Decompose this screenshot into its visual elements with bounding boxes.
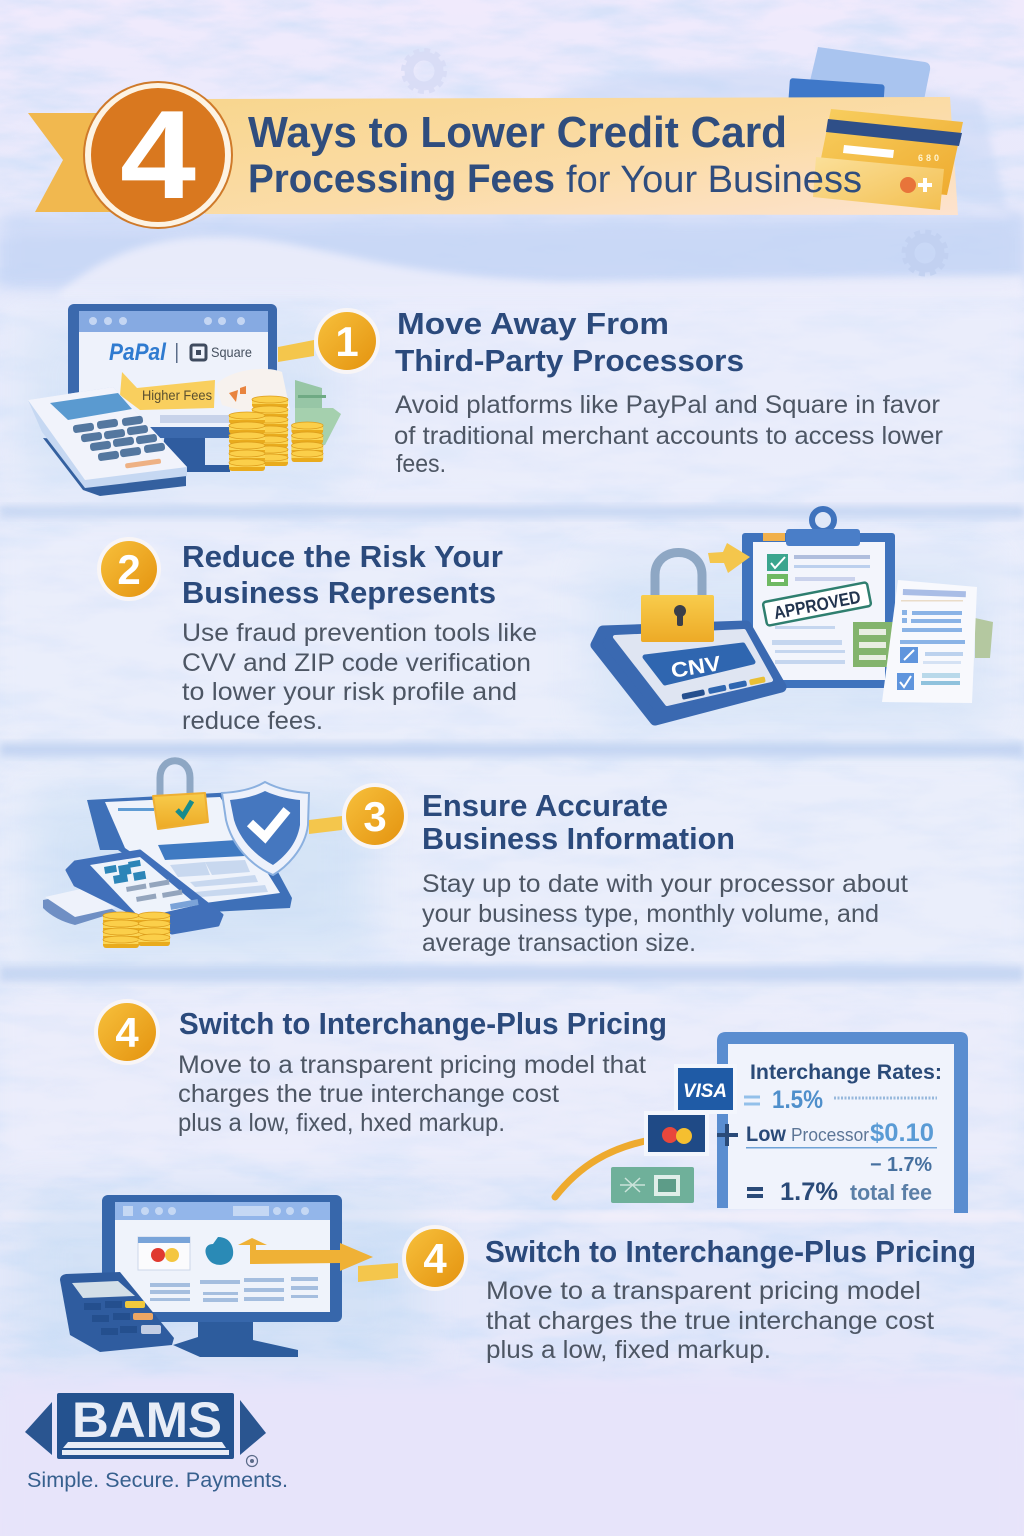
arrow: curved yellow bbox=[555, 1140, 650, 1197]
panel: step 4 first bbox=[94, 999, 968, 1213]
body 3: your business type, monthly volume, and bbox=[422, 900, 879, 928]
icon: cash stack bbox=[295, 380, 341, 445]
body 4: charges the true interchange cost bbox=[178, 1080, 559, 1108]
heading 3 bbox=[422, 788, 735, 856]
ribbon tail bbox=[28, 113, 110, 212]
panel: step 4 second bbox=[60, 1195, 976, 1364]
badge 2: 2 bbox=[117, 546, 141, 593]
illustration: document screen bbox=[87, 792, 292, 912]
icon: blue cards behind banner bbox=[788, 47, 930, 111]
panel: step 3 bbox=[43, 761, 908, 957]
icon: gold credit cards: 680 bbox=[918, 153, 942, 163]
rate rows: $0.10 bbox=[870, 1119, 934, 1147]
title text: for Your Business bbox=[566, 159, 862, 201]
rate rows: Interchange Rates: bbox=[750, 1061, 942, 1084]
body 1 bbox=[394, 391, 943, 478]
body 2 bbox=[182, 619, 537, 735]
body 4: Move to a transparent pricing model that bbox=[178, 1051, 646, 1079]
icon: background gear top bbox=[403, 50, 445, 92]
illustration: monitor with processors: PaPal bbox=[109, 339, 167, 366]
heading 2 bbox=[182, 539, 503, 610]
rate rows bbox=[717, 1061, 942, 1206]
connector 4 bbox=[358, 1263, 398, 1282]
illustration: clipboard approved: APPROVED bbox=[772, 587, 862, 623]
icon: green card bbox=[611, 1167, 694, 1203]
body 4b: that charges the true interchange cost bbox=[486, 1307, 934, 1335]
icon: visa card: VISA bbox=[683, 1081, 727, 1102]
heading 2: Reduce the Risk Your bbox=[182, 539, 503, 574]
badge 3: 3 bbox=[363, 793, 387, 840]
body 4b bbox=[486, 1277, 934, 1364]
icon: coin stacks bbox=[229, 396, 323, 471]
badge 4 bbox=[94, 999, 160, 1065]
illustration: monitor with pricing bbox=[102, 1195, 342, 1357]
body 2: Use fraud prevention tools like bbox=[182, 619, 537, 647]
heading 2: Business Represents bbox=[182, 575, 496, 610]
heading 4b: Switch to Interchange-Plus Pricing bbox=[485, 1234, 976, 1269]
body 1: of traditional merchant accounts to access lower bbox=[394, 422, 943, 450]
badge 4b: 4 bbox=[423, 1235, 447, 1282]
badge 1: 1 bbox=[335, 318, 359, 365]
icon: coins bbox=[103, 912, 170, 948]
heading 1: Move Away From bbox=[397, 306, 669, 341]
heading 4: Switch to Interchange-Plus Pricing bbox=[179, 1006, 667, 1041]
illustration: clipboard approved bbox=[708, 509, 895, 688]
body 4: plus a low, fixed, hxed markup. bbox=[178, 1109, 505, 1137]
body 4b: plus a low, fixed markup. bbox=[486, 1336, 771, 1364]
rate rows: Low bbox=[746, 1123, 787, 1146]
chart: interchange rate panel bbox=[717, 1032, 968, 1213]
arrow: yellow right bbox=[238, 1238, 373, 1271]
panel: step 1 bbox=[28, 304, 943, 496]
rate rows: 1.7% bbox=[780, 1178, 838, 1206]
title banner bbox=[28, 82, 958, 228]
badge 1 bbox=[314, 308, 380, 374]
icon: padlock on CVV terminal bbox=[596, 552, 781, 720]
badge 4: 4 bbox=[115, 1009, 139, 1056]
illustration: monitor with processors bbox=[68, 304, 290, 472]
icon: padlock check bbox=[153, 761, 208, 829]
icon: card stack bbox=[43, 888, 117, 925]
icon: terminal bbox=[67, 851, 222, 933]
illustration: monitor with processors: Square bbox=[211, 344, 252, 360]
body 3: average transaction size. bbox=[422, 929, 696, 957]
connector 3 bbox=[309, 816, 342, 834]
icon: shield bbox=[222, 782, 309, 875]
rate rows: Processor bbox=[791, 1125, 869, 1145]
panel: step 2 bbox=[97, 509, 993, 735]
rate rows: − 1.7% bbox=[870, 1154, 932, 1176]
title text: Processing Fees bbox=[248, 157, 555, 201]
badge 3 bbox=[342, 783, 408, 849]
illustration: monitor with processors: Higher Fees bbox=[142, 387, 212, 403]
badge 2 bbox=[97, 537, 161, 601]
body 4 bbox=[178, 1051, 646, 1137]
title text: Ways to Lower Credit Card bbox=[248, 108, 787, 157]
rate rows: 1.5% bbox=[772, 1086, 823, 1114]
body 3 bbox=[422, 870, 908, 957]
icon: mastercard bbox=[644, 1111, 709, 1156]
heading 1: Third-Party Processors bbox=[395, 343, 744, 378]
rate rows: total fee bbox=[850, 1180, 932, 1205]
banner strip bbox=[205, 97, 958, 215]
icon: gold credit cards bbox=[813, 109, 963, 210]
icon: visa card bbox=[674, 1064, 737, 1114]
heading 1 bbox=[395, 306, 744, 378]
body 3: Stay up to date with your processor about bbox=[422, 870, 908, 898]
connector 1 bbox=[278, 340, 314, 362]
body 2: reduce fees. bbox=[182, 707, 323, 735]
logo: BAMS: BAMS bbox=[72, 1392, 222, 1448]
badge 4b bbox=[402, 1225, 468, 1291]
number seal bbox=[84, 82, 232, 228]
body 4b: Move to a transparent pricing model bbox=[486, 1277, 921, 1305]
icon: card terminal bbox=[28, 387, 187, 496]
icon: checklist paper bbox=[882, 580, 993, 703]
body 1: fees. bbox=[396, 450, 446, 478]
body 1: Avoid platforms like PayPal and Square in favor bbox=[395, 391, 940, 419]
body 2: CVV and ZIP code verification bbox=[182, 649, 531, 677]
logo: BAMS bbox=[25, 1392, 266, 1466]
tagline: Simple. Secure. Payments. bbox=[27, 1469, 288, 1492]
icon: calculator bbox=[60, 1272, 174, 1352]
title text bbox=[248, 108, 862, 201]
body 2: to lower your risk profile and bbox=[182, 678, 517, 706]
heading 3: Business Information bbox=[422, 821, 735, 856]
icon: background gear bottom bbox=[904, 232, 946, 274]
number seal: 4 bbox=[120, 84, 196, 225]
icon: padlock on CVV terminal: CNV bbox=[669, 652, 722, 683]
heading 3: Ensure Accurate bbox=[422, 788, 668, 823]
